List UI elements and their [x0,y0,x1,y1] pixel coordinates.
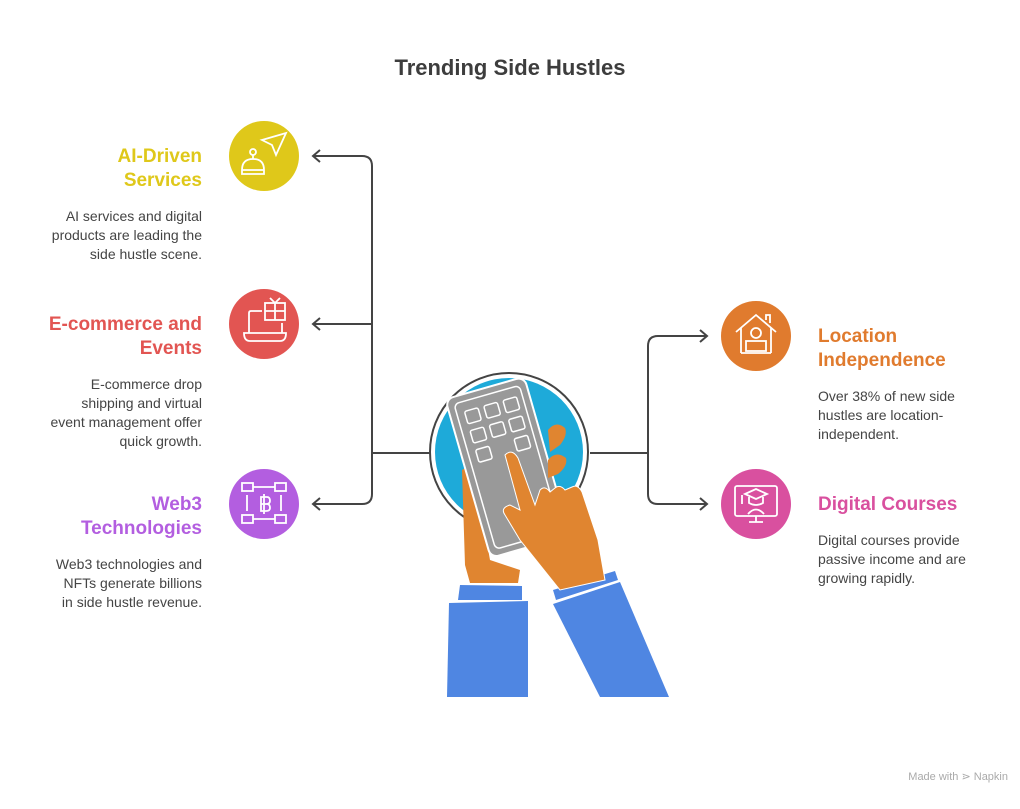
text: digital courses: Digital courses provide [818,532,960,548]
phone [445,377,570,558]
icon: location independence [721,301,791,371]
text: AI-driven [52,146,202,262]
text: web3: NFTs generate billions [63,575,202,591]
text: e-commerce: quick growth. [120,433,202,449]
text: e-commerce: E-commerce drop [91,376,202,392]
text: AI-driven: side hustle scene. [90,246,202,262]
icon: digital courses [721,469,791,539]
text: e-commerce: shipping and virtual [81,395,202,411]
icon: AI-driven services [229,121,299,191]
text: web3: Web3 [152,494,202,515]
text: web3: Web3 technologies and [56,556,202,572]
text: AI-driven: products are leading the [52,227,202,243]
text: location independence: Location [818,326,897,347]
text: digital courses: passive income and are [818,551,966,567]
text: e-commerce: Events [140,338,202,359]
text: e-commerce [49,314,202,449]
footer credit: Made with ⋗ Napkin [908,771,1008,783]
icon: web3 [229,469,299,539]
text: web3: Technologies [81,518,202,539]
text: e-commerce: E-commerce and [49,314,202,335]
text: AI-driven: Services [124,170,202,191]
text: digital courses: growing rapidly. [818,570,915,586]
text: AI-driven: AI services and digital [66,208,202,224]
central illustration [430,373,669,697]
text: location independence [818,326,955,442]
text: web3: in side hustle revenue. [62,594,202,610]
right hand [503,452,605,590]
text: location independence: Over 38% of new side [818,388,955,404]
text: location independence: hustles are location- [818,407,944,423]
title: Trending Side Hustles [394,55,626,80]
text: location independence: independent. [818,426,899,442]
icon: e-commerce [229,289,299,359]
sleeves [447,601,528,697]
text: web3 [56,494,202,610]
text: e-commerce: event management offer [50,414,202,430]
text: digital courses: Digital Courses [818,494,957,515]
text: AI-driven: AI-Driven [118,146,202,167]
text: digital courses [818,494,966,586]
text: location independence: Independence [818,350,946,371]
left hand [462,468,520,583]
connectors [313,150,707,510]
